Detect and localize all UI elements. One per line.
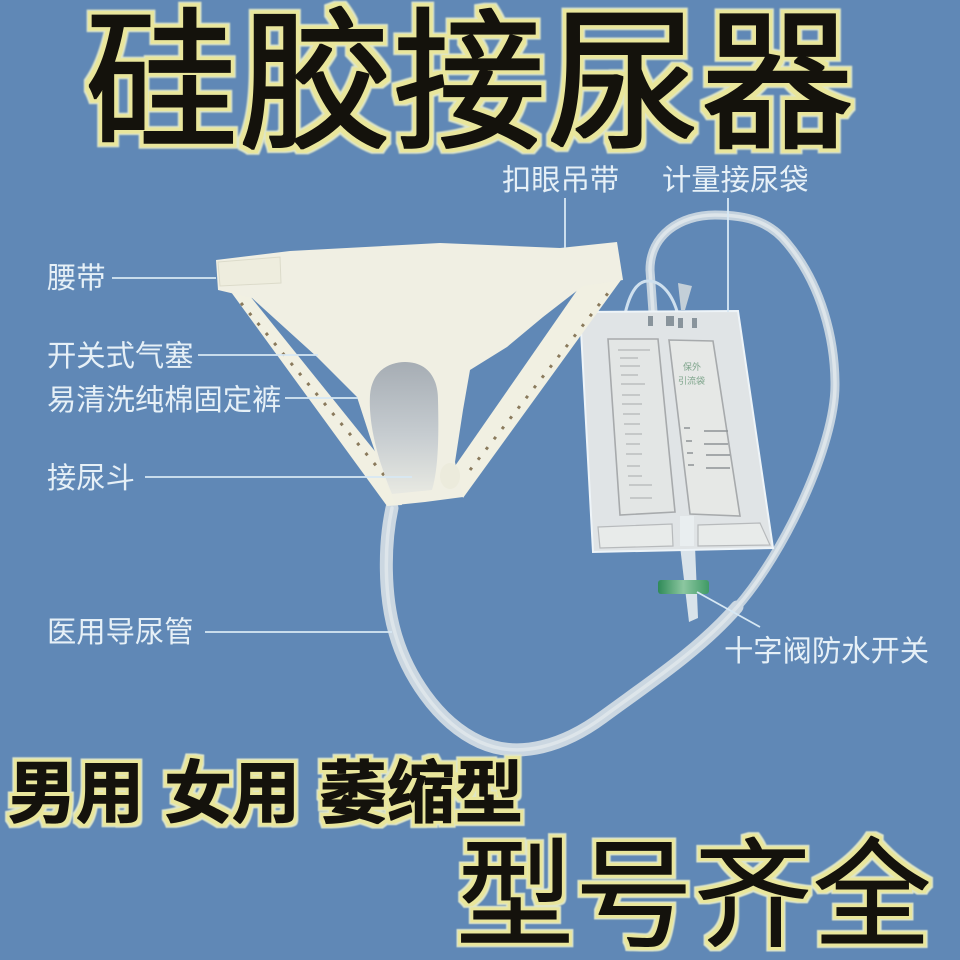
label: catheter: 医用导尿管: [47, 616, 193, 649]
bag vent cap: [678, 283, 692, 310]
label: cotton brief: 易清洗纯棉固定裤: [47, 384, 281, 417]
urine collection bag: [580, 281, 773, 622]
label: cross valve: 十字阀防水开关: [724, 635, 929, 668]
bag right panel: [669, 340, 740, 516]
right strap: [455, 280, 621, 498]
title: 硅胶接尿器: [85, 0, 855, 169]
bag top clips: [648, 316, 697, 328]
bag bottom panel: [598, 523, 770, 548]
label: buttonhole strap: 扣眼吊带: [502, 164, 619, 197]
bag label text: 保外: [683, 361, 701, 372]
strap holes: [241, 303, 388, 480]
label: waist belt: 腰带: [47, 262, 106, 295]
subheading: models: 萎缩型: [319, 756, 523, 832]
label: funnel: 接尿斗: [47, 462, 135, 495]
bag scale marks: [618, 350, 652, 498]
belt tab: [218, 257, 281, 286]
bag label text line 2: 引流袋: [678, 375, 705, 386]
drain tube: [680, 546, 698, 622]
strap holes right: [470, 288, 612, 470]
bag info rows: [684, 428, 730, 468]
subheading: models: 男用: [8, 756, 144, 832]
waist belt and cotton brief: [216, 242, 623, 506]
bag left panel: [608, 339, 675, 515]
subheading: models: 女用: [164, 756, 300, 832]
bag body: [580, 311, 773, 552]
bag hanger loop: [625, 281, 678, 315]
label: air plug: 开关式气塞: [47, 340, 193, 373]
leader lines: [112, 198, 760, 632]
heading: full range: 型号齐全: [456, 831, 932, 960]
urine funnel: [370, 362, 438, 494]
brief body: [216, 242, 623, 505]
catheter tube: [386, 215, 835, 750]
left strap: [231, 292, 402, 506]
label: measuring bag: 计量接尿袋: [662, 164, 808, 197]
cross valve: [658, 580, 709, 594]
bag centre tube: [680, 516, 694, 546]
funnel side bulge: [440, 463, 460, 489]
